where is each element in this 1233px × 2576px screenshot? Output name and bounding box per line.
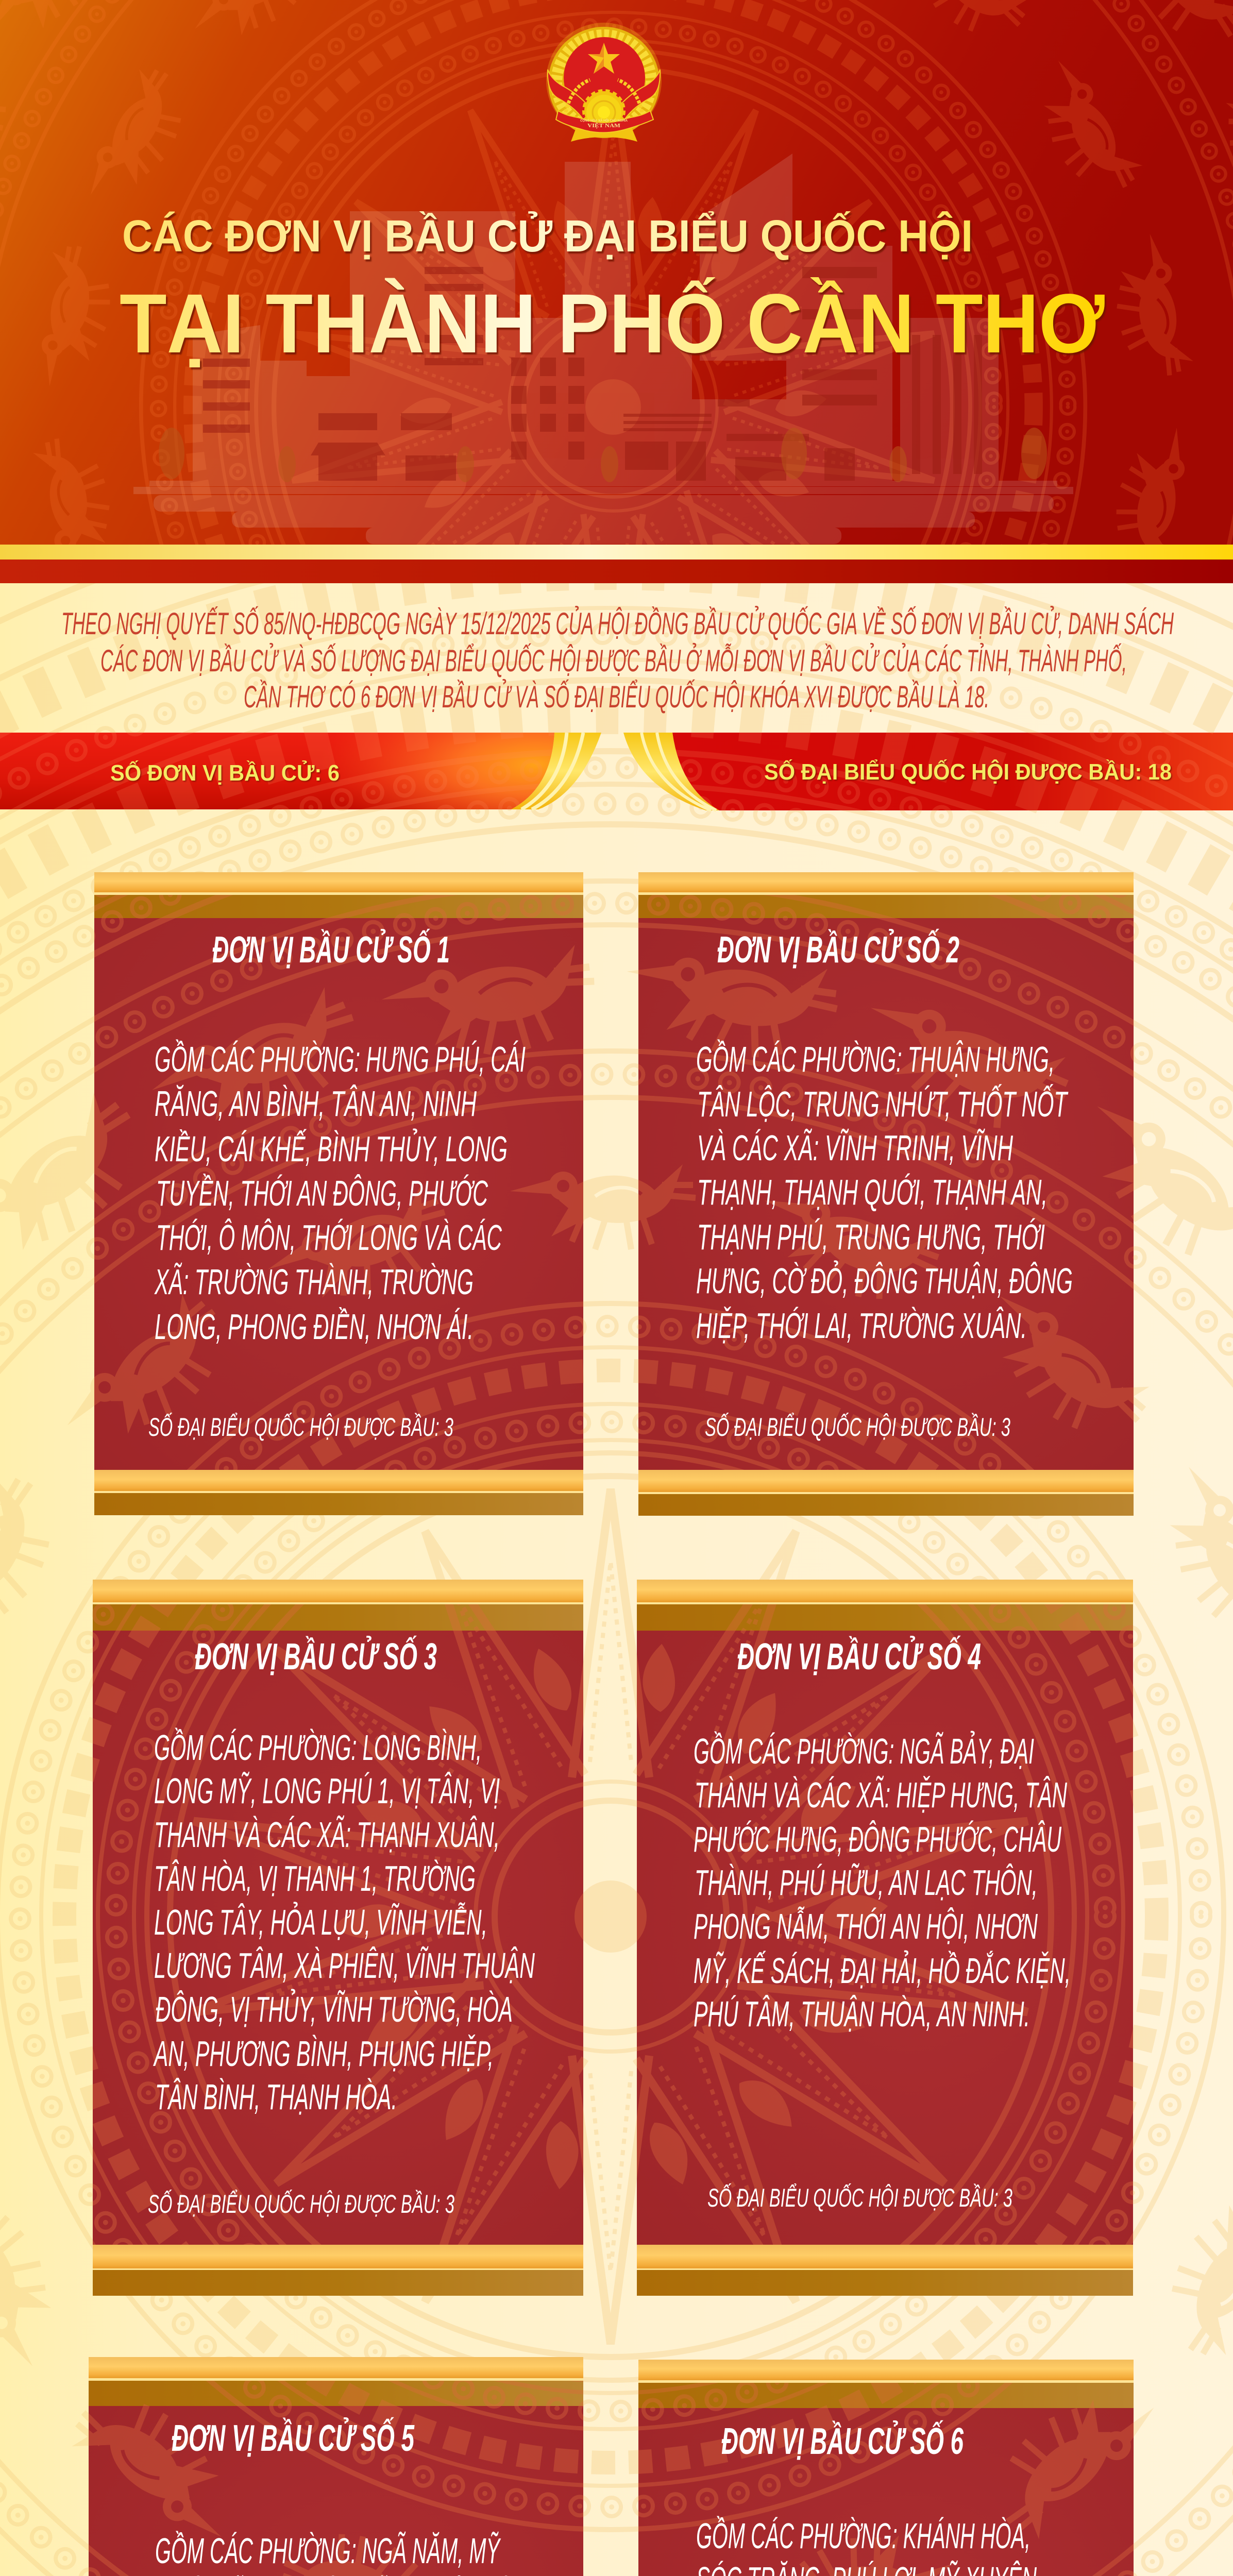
heading: ĐƠN VỊ BẦU CỬ SỐ 1 [212, 929, 450, 971]
ward list: HIỆP, THỚI LAI, TRƯỜNG XUÂN. [696, 1306, 1027, 1346]
ward list: VÀ CÁC XÃ: VĨNH TRINH, VĨNH [697, 1128, 1013, 1168]
ribbon left: number of constituencies: SỐ ĐƠN VỊ BẦU CỬ: 6 [110, 759, 340, 786]
icon: national emblem of Vietnam: VIỆT NAM [587, 122, 621, 129]
title line 2: TẠI THÀNH PHỐ CẦN THƠ [120, 276, 1105, 370]
ward list: GỒM CÁC PHƯỜNG: LONG BÌNH, [154, 1727, 482, 1768]
ward list: GỒM CÁC PHƯỜNG: NGÃ NĂM, MỸ [155, 2531, 501, 2571]
ward list: LONG MỸ, LONG PHÚ 1, VỊ TÂN, VỊ [154, 1771, 500, 1811]
ward list [155, 2531, 525, 2576]
panel: constituency 3 [93, 1580, 583, 2296]
panel: constituency 5 [89, 2357, 583, 2576]
heading: ĐƠN VỊ BẦU CỬ SỐ 4 [737, 1636, 981, 1677]
icon: national emblem of Vietnam: CỘNG HÒA XÃ HỘI CHỦ NGHĨA [580, 118, 628, 123]
deputies count: SỐ ĐẠI BIỂU QUỐC HỘI ĐƯỢC BẦU: 3 [148, 1412, 453, 1442]
intro text [61, 606, 1174, 714]
deputies count: SỐ ĐẠI BIỂU QUỐC HỘI ĐƯỢC BẦU: 3 [707, 2183, 1012, 2212]
ward list: LƯƠNG TÂM, XÀ PHIÊN, VĨNH THUẬN [154, 1945, 535, 1986]
heading: ĐƠN VỊ BẦU CỬ SỐ 2 [717, 929, 959, 971]
ward list: THỚI, Ô MÔN, THỚI LONG VÀ CÁC [156, 1217, 502, 1258]
ward list: TÂN HÒA, VỊ THANH 1, TRƯỜNG [154, 1858, 476, 1899]
ward list: LONG, PHONG ĐIỀN, NHƠN ÁI. [155, 1307, 474, 1347]
ward list: KIỀU, CÁI KHẾ, BÌNH THỦY, LONG [155, 1128, 508, 1169]
ribbon right: number of deputies [623, 733, 1233, 810]
panel: constituency 4 [637, 1580, 1133, 2296]
gold divider band [0, 545, 1233, 560]
ward list [153, 1727, 535, 2117]
panel: constituency 2 [638, 872, 1134, 1516]
ward list [696, 2516, 1052, 2576]
ribbon left: number of constituencies [0, 733, 601, 810]
red divider band [0, 560, 1233, 583]
panel: constituency 1 [94, 872, 583, 1515]
icon: national emblem of Vietnam [546, 23, 662, 142]
ward list: ĐÔNG, VỊ THỦY, VĨNH TƯỜNG, HÒA [156, 1988, 513, 2029]
ward list [694, 1731, 1071, 2034]
ward list: AN, PHƯƠNG BÌNH, PHỤNG HIỆP, [153, 2033, 494, 2074]
deputies count: SỐ ĐẠI BIỂU QUỐC HỘI ĐƯỢC BẦU: 3 [148, 2189, 454, 2218]
ward list: GỒM CÁC PHƯỜNG: HƯNG PHÚ, CÁI [155, 1039, 526, 1079]
ward list [154, 1039, 526, 1347]
panel: constituency 6 [638, 2360, 1134, 2576]
city skyline illustration [133, 154, 1073, 544]
heading: ĐƠN VỊ BẦU CỬ SỐ 3 [195, 1636, 437, 1677]
heading: ĐƠN VỊ BẦU CỬ SỐ 5 [172, 2417, 415, 2459]
ward list: THANH VÀ CÁC XÃ: THẠNH XUÂN, [154, 1815, 500, 1855]
ward list [696, 1039, 1073, 1346]
title line 1: CÁC ĐƠN VỊ BẦU CỬ ĐẠI BIỂU QUỐC HỘI [122, 211, 973, 261]
heading: ĐƠN VỊ BẦU CỬ SỐ 6 [721, 2420, 964, 2462]
deputies count: SỐ ĐẠI BIỂU QUỐC HỘI ĐƯỢC BẦU: 3 [705, 1412, 1010, 1442]
ward list: LONG TÂY, HỎA LỰU, VĨNH VIỄN, [154, 1901, 487, 1942]
ward list: TÂN BÌNH, THẠNH HÒA. [155, 2077, 397, 2117]
ward list: RĂNG, AN BÌNH, TÂN AN, NINH [155, 1083, 477, 1124]
ward list: TUYỀN, THỚI AN ĐÔNG, PHƯỚC [156, 1173, 488, 1213]
ribbon right: number of deputies: SỐ ĐẠI BIỂU QUỐC HỘI ĐƯỢC BẦU: 18 [764, 758, 1172, 785]
header banner [0, 0, 1233, 545]
ward list: XÃ: TRƯỜNG THÀNH, TRƯỜNG [154, 1262, 474, 1302]
